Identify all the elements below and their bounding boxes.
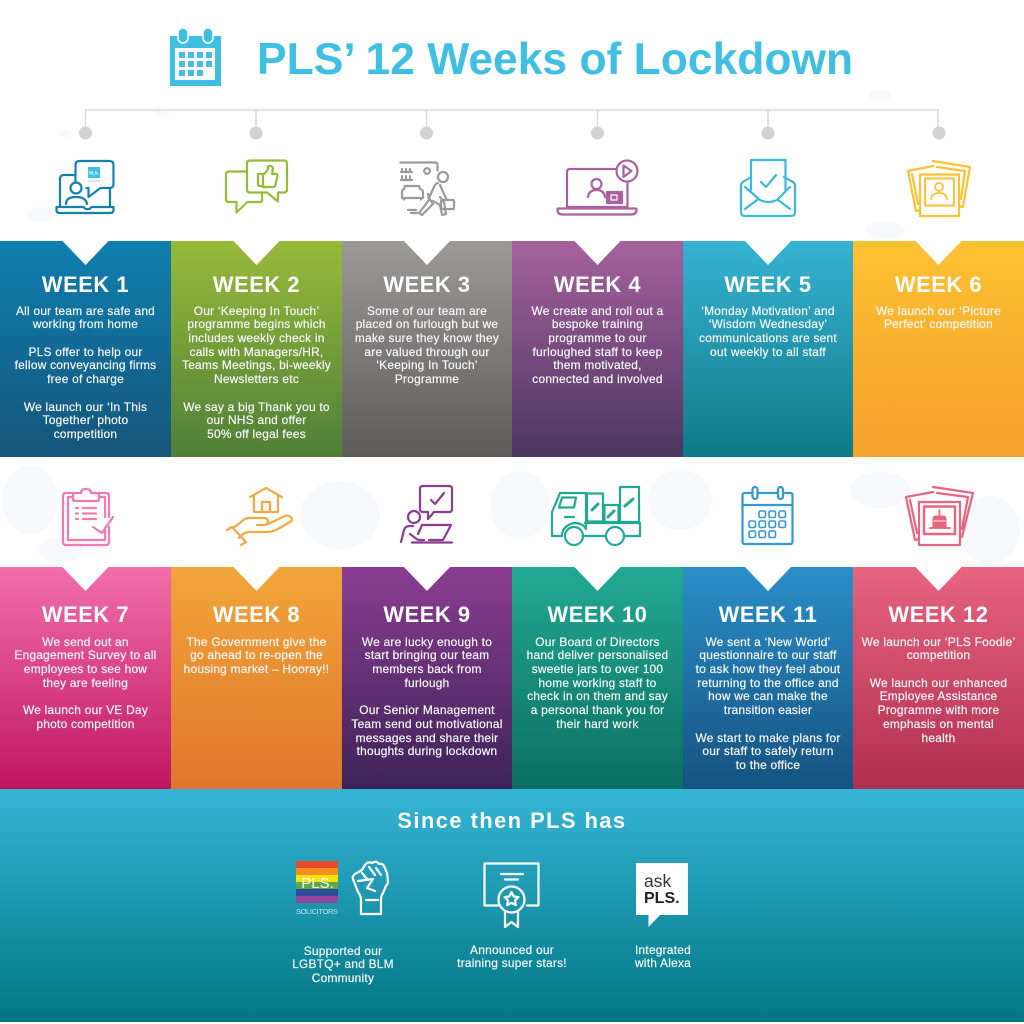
panel: week 7: employees to see how <box>24 662 147 676</box>
panel: week 12: competition <box>907 648 970 662</box>
panel: week 3: Programme <box>395 372 459 386</box>
panel: week 8: WEEK 8 <box>213 602 300 627</box>
panel: week 5 <box>683 241 853 457</box>
panel: week 9: start bringing our team <box>365 648 489 662</box>
panel: week 1: competition <box>54 427 117 441</box>
panel: week 12: Programme with more <box>878 703 999 717</box>
panel: week 11: to ask how they feel about <box>696 662 840 676</box>
panel: week 11: how we can make the <box>708 689 828 703</box>
panel: week 2: WEEK 2 <box>213 272 300 297</box>
panel: week 6: We launch our ‘Picture <box>876 304 1001 318</box>
panel: week 8: The Government give the <box>187 634 326 648</box>
panel: week 3: Some of our team are <box>367 304 487 318</box>
panel: week 12: We launch our enhanced <box>870 676 1007 690</box>
panel: week 12: health <box>922 731 955 745</box>
panel: week 5: ‘Monday Motivation’ and <box>701 304 835 318</box>
panel: week 9 <box>342 567 512 789</box>
panel: week 9: thoughts during lockdown <box>357 744 497 758</box>
panel: week 12: Employee Assistance <box>880 689 997 703</box>
panel: week 11 <box>683 567 853 789</box>
panel: week 3: placed on furlough but we <box>356 317 498 331</box>
panel: week 10: check in on them and say <box>527 689 668 703</box>
panel: week 6: WEEK 6 <box>895 272 982 297</box>
panel: week 7 <box>0 567 171 789</box>
panel: week 2: includes weekly check in <box>188 331 325 345</box>
panel: week 4: WEEK 4 <box>554 272 641 297</box>
panel: week 5: communications are sent <box>699 331 837 345</box>
panel: week 4: connected and involved <box>532 372 663 386</box>
panel: week 11: WEEK 11 <box>719 602 817 627</box>
text: training <box>457 942 567 970</box>
logo: PLS rainbow: SOLICITORS <box>296 907 338 916</box>
panel: week 7: We send out an <box>42 634 129 648</box>
panel: week 1: All our team are safe and <box>16 304 155 318</box>
panel: week 2: Teams Meetings, bi-weekly <box>182 358 331 372</box>
panel: week 1: working from home <box>33 317 138 331</box>
panel: week 11: transition easier <box>724 703 812 717</box>
text: Alexa: Integrated <box>635 942 691 956</box>
panel: week 3: make sure they know they <box>355 331 499 345</box>
panel: week 12: We launch our ‘PLS Foodie’ <box>862 634 1015 648</box>
panel: week 2: Our ‘Keeping In Touch’ <box>194 304 319 318</box>
text: Alexa: with Alexa <box>635 956 691 970</box>
panel: week 7: photo competition <box>36 717 135 731</box>
logo: ask PLS: PLS. <box>644 890 680 907</box>
title: PLS’ 12 Weeks of Lockdown <box>257 35 853 84</box>
text: LGBTQ+ and BLM: LGBTQ+ and BLM <box>292 957 394 971</box>
panel: week 7: they are feeling <box>43 676 128 690</box>
panel: week 11: our staff to safely return <box>702 744 834 758</box>
panel: week 10: home working staff to <box>538 676 657 690</box>
panel: week 11: questionnaire to our staff <box>699 648 837 662</box>
panel: week 12: WEEK 12 <box>889 602 988 627</box>
panel: week 5: WEEK 5 <box>724 272 812 297</box>
panel: week 11: returning to the office and <box>697 676 839 690</box>
panel: week 11: We start to make plans for <box>695 731 841 745</box>
panel: week 9: We are lucky enough to <box>362 634 492 648</box>
panel: week 8 <box>171 567 342 789</box>
panel: week 2 <box>171 241 342 457</box>
panel: week 9: WEEK 9 <box>383 602 471 627</box>
panel: week 7: WEEK 7 <box>42 602 129 627</box>
panel: week 9: furlough <box>404 676 449 690</box>
icon: week 1 video call: PLS. <box>89 170 99 176</box>
panel: week 8: housing market – Hooray!! <box>184 662 329 676</box>
panel: week 7: We launch our VE Day <box>23 703 148 717</box>
logo: ask PLS: ask <box>644 871 671 891</box>
panel: week 10: their hard work <box>556 717 639 731</box>
text: LGBTQ+ and BLM: Supported our <box>304 944 382 958</box>
text: training: Announced our <box>470 942 554 956</box>
panel: week 7: Engagement Survey to all <box>14 648 157 662</box>
text: Alexa <box>634 942 691 970</box>
panel: week 12: emphasis on mental <box>883 717 994 731</box>
text: training: training super stars! <box>457 956 567 970</box>
panel: week 9: Team send out motivational <box>351 717 503 731</box>
panel: week 2: Newsletters etc <box>214 372 299 386</box>
panel: week 1: free of charge <box>47 372 124 386</box>
panel: week 3: are valued through our <box>364 345 490 359</box>
panel: week 4: bespoke training <box>552 317 643 331</box>
panel: week 9: members back from <box>372 662 482 676</box>
panel: week 2: programme begins which <box>187 317 326 331</box>
panel: week 10: WEEK 10 <box>548 602 647 627</box>
panel: week 10: a personal thank you for <box>531 703 664 717</box>
panel: week 2: our NHS and offer <box>207 413 306 427</box>
panel: week 1: We launch our ‘In This <box>24 400 147 414</box>
panel: week 9: Our Senior Management <box>359 703 495 717</box>
panel: week 4: them motivated, <box>553 358 642 372</box>
panel: week 1 <box>0 241 171 457</box>
panel: week 10: sweetie jars to over 100 <box>532 662 663 676</box>
panel: week 4: We create and roll out a <box>531 304 664 318</box>
text: LGBTQ+ and BLM: Community <box>312 971 374 985</box>
panel: week 2: We say a big Thank you to <box>183 400 330 414</box>
logo: PLS rainbow: PLS. <box>301 875 334 892</box>
panel: week 10: hand deliver personalised <box>527 648 668 662</box>
panel: week 3: ‘Keeping In Touch’ <box>376 358 478 372</box>
panel: week 5: ‘Wisdom Wednesday’ <box>709 317 827 331</box>
heading: since then: Since then PLS has <box>397 808 627 832</box>
panel: week 6: Perfect’ competition <box>884 317 993 331</box>
panel: week 6 <box>853 241 1024 457</box>
panel: week 1: PLS offer to help our <box>28 345 143 359</box>
panel: week 11: to the office <box>736 758 800 772</box>
panel: week 2: 50% off legal fees <box>207 427 306 441</box>
panel: week 4: furloughed staff to keep <box>532 345 663 359</box>
text: LGBTQ+ and BLM <box>292 944 394 985</box>
panel: week 10: Our Board of Directors <box>535 634 660 648</box>
panel: week 1: Together’ photo <box>43 413 128 427</box>
panel: week 10 <box>512 567 683 789</box>
panel: week 1: fellow conveyancing firms <box>15 358 156 372</box>
panel: week 4 <box>512 241 683 457</box>
panel: week 1: WEEK 1 <box>42 272 129 297</box>
panel: week 4: programme to our <box>548 331 647 345</box>
panel: week 11: We sent a ‘New World’ <box>705 634 831 648</box>
panel: week 2: calls with Managers/HR, <box>190 345 323 359</box>
panel: week 9: messages and share their <box>356 731 498 745</box>
panel: week 12 <box>853 567 1024 789</box>
panel: week 5: out weekly to all staff <box>710 345 826 359</box>
panel: week 8: go ahead to re-open the <box>190 648 323 662</box>
panel: week 3 <box>342 241 512 457</box>
panel: since then <box>0 789 1024 1022</box>
panel: week 3: WEEK 3 <box>383 272 471 297</box>
